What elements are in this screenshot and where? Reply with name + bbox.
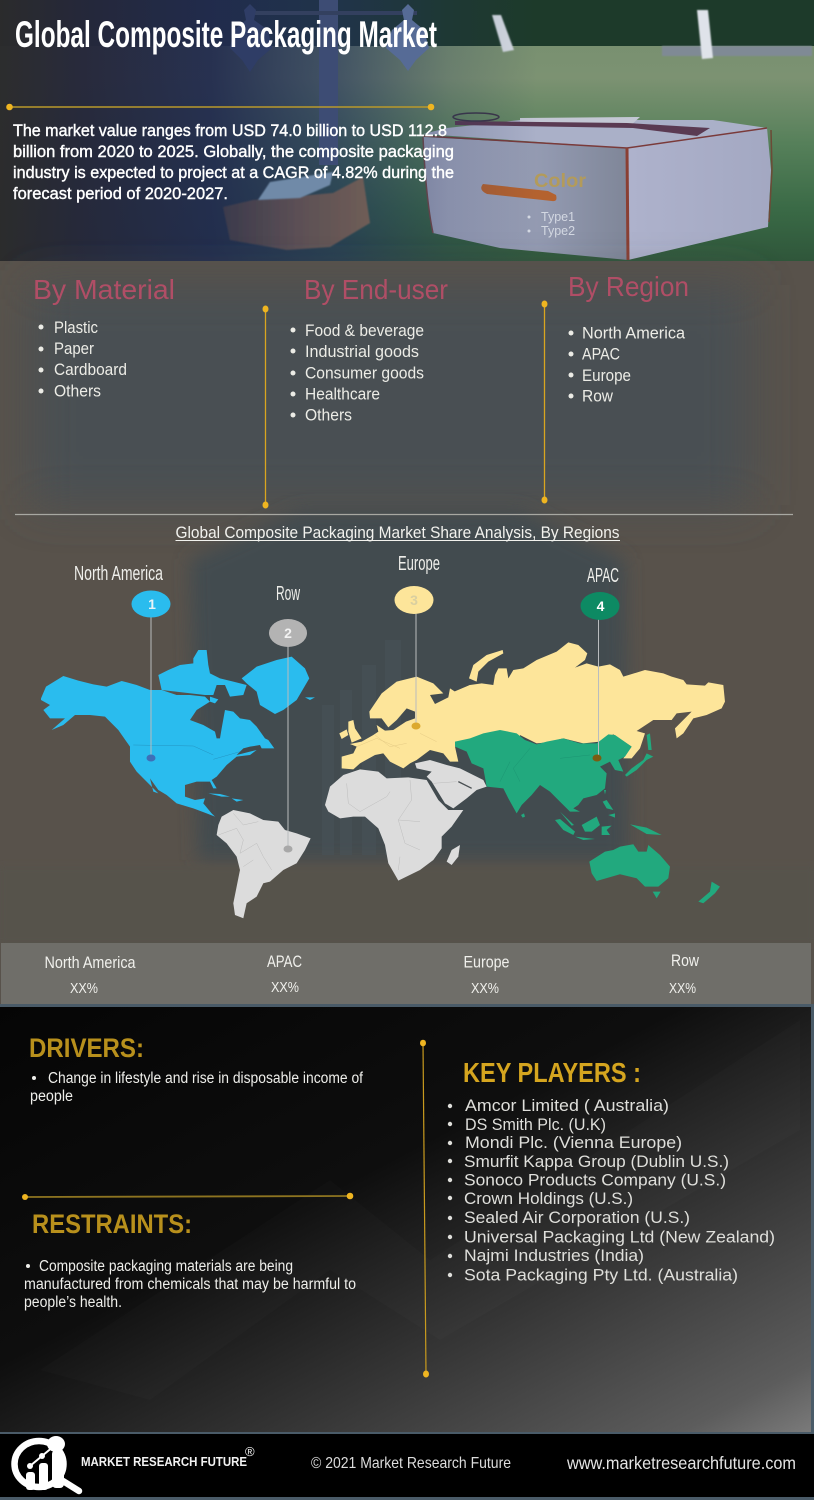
column: by region: North America xyxy=(582,324,686,342)
drivers block xyxy=(29,1033,364,1105)
key players list: Crown Holdings (U.S.) xyxy=(464,1189,633,1208)
faint color legend: Type2 xyxy=(541,224,575,238)
restraints block: RESTRAINTS: xyxy=(32,1209,192,1239)
horizontal divider xyxy=(22,1193,353,1200)
hero dark overlay xyxy=(0,0,814,261)
pin 3: europe xyxy=(394,553,440,730)
intro paragraph: billion from 2020 to 2025. Globally, the composite packaging xyxy=(13,143,454,161)
pin 1: north america xyxy=(74,563,170,762)
website: www.marketresearchfuture.com xyxy=(566,1453,796,1473)
column: by region: Row xyxy=(582,386,614,406)
hero photo panel xyxy=(0,0,814,261)
map: north america xyxy=(41,650,315,817)
pin 1: north america: 1 xyxy=(148,596,156,612)
intro paragraph: forecast period of 2020-2027. xyxy=(13,185,228,203)
column: by material: Cardboard xyxy=(54,360,127,379)
divider with dots xyxy=(6,104,434,110)
column: by end-user: Others xyxy=(305,406,352,424)
share table: Row xyxy=(671,952,699,970)
pin 3: europe: 3 xyxy=(410,592,418,608)
vertical divider: lower xyxy=(420,1040,429,1378)
key players list: KEY PLAYERS : xyxy=(463,1057,641,1088)
key players list: DS Smith Plc. (U.K) xyxy=(465,1115,606,1134)
brand name: MARKET RESEARCH FUTURE xyxy=(81,1455,247,1469)
restraints block xyxy=(24,1209,356,1311)
photo: gift box xyxy=(423,113,772,260)
vertical divider: right xyxy=(542,300,548,504)
key players list: Mondi Plc. (Vienna Europe) xyxy=(465,1133,682,1152)
title: Global Composite Packaging Market xyxy=(15,14,437,55)
map: russia xyxy=(450,642,725,762)
vertical divider: left xyxy=(262,306,268,508)
column: by material: Paper xyxy=(54,339,94,358)
share table: North America xyxy=(44,954,136,972)
drivers block: Change in lifestyle and rise in disposable income of xyxy=(48,1070,364,1087)
column: by material xyxy=(33,274,175,400)
key players list: Sealed Air Corporation (U.S.) xyxy=(464,1208,690,1227)
share table: Europe xyxy=(464,954,510,972)
column: by region: Europe xyxy=(582,366,631,385)
intro paragraph xyxy=(13,122,454,203)
copyright: © 2021 Market Research Future xyxy=(311,1455,511,1472)
column: by end-user: Consumer goods xyxy=(305,364,424,382)
map: asia pacific xyxy=(455,730,720,903)
photo: basket xyxy=(223,172,370,250)
column: by end-user: Healthcare xyxy=(305,384,380,404)
pin 4: apac: APAC xyxy=(587,565,619,587)
drivers block: people xyxy=(30,1088,73,1105)
registered mark: ® xyxy=(245,1444,255,1459)
intro paragraph: The market value ranges from USD 74.0 billion to USD 112.8 xyxy=(13,122,447,140)
column: by material: Plastic xyxy=(54,318,98,337)
pin 2: row: Row xyxy=(276,583,300,605)
column: by region xyxy=(568,271,689,406)
map heading: Global Composite Packaging Market Share Analysis, By Regions xyxy=(176,523,620,542)
faint color legend: Type1 xyxy=(541,210,575,224)
key players list: Amcor Limited ( Australia) xyxy=(465,1096,669,1115)
key players list xyxy=(448,1057,775,1284)
share table: APAC xyxy=(267,953,302,971)
map: europe xyxy=(339,650,520,769)
column: by end-user xyxy=(290,274,448,424)
key players list: Universal Packaging Ltd (New Zealand) xyxy=(464,1228,775,1246)
faint color legend: Color xyxy=(534,171,587,192)
share table: XX% xyxy=(271,980,299,996)
photo: lamp post xyxy=(230,0,429,165)
faint color legend xyxy=(528,171,587,238)
pin 2: row xyxy=(269,583,307,852)
lower dark panel xyxy=(0,1007,814,1432)
restraints block: manufactured from chemicals that may be harmful to xyxy=(24,1276,356,1293)
map: africa and middle east xyxy=(325,760,487,881)
icon: logo magnifier with bars xyxy=(14,1436,79,1491)
column: by region: By Region xyxy=(568,271,689,302)
share table: XX% xyxy=(70,981,98,997)
column: by material: By Material xyxy=(33,274,175,305)
pin 1: north america: North America xyxy=(74,563,164,585)
restraints block: Composite packaging materials are being xyxy=(39,1258,293,1275)
key players list: Smurfit Kappa Group (Dublin U.S.) xyxy=(464,1152,729,1171)
intro paragraph: industry is expected to project at a CAGR of 4.82% during the xyxy=(13,164,454,182)
map: south america xyxy=(217,810,311,918)
footer xyxy=(0,1432,814,1500)
pin 4: apac xyxy=(580,565,620,762)
pin 4: apac: 4 xyxy=(597,598,605,614)
key players list: Sota Packaging Pty Ltd. (Australia) xyxy=(464,1266,738,1284)
key players list: Najmi Industries (India) xyxy=(464,1246,644,1265)
middle section background xyxy=(0,261,814,1006)
restraints block: people’s health. xyxy=(24,1294,122,1311)
pin 3: europe: Europe xyxy=(398,553,440,575)
column: by end-user: Industrial goods xyxy=(305,342,419,361)
column: by material: Others xyxy=(54,382,101,400)
world map xyxy=(41,642,725,918)
key players list: Sonoco Products Company (U.S.) xyxy=(464,1170,726,1190)
share table: XX% xyxy=(669,981,696,997)
share table: XX% xyxy=(471,981,499,997)
photo: tree line xyxy=(0,0,814,59)
pin 2: row: 2 xyxy=(284,625,292,641)
column: by end-user: By End-user xyxy=(304,274,448,305)
column: by end-user: Food & beverage xyxy=(305,321,424,340)
column: by region: APAC xyxy=(582,344,620,364)
share table xyxy=(0,943,814,1007)
drivers block: DRIVERS: xyxy=(29,1033,144,1063)
